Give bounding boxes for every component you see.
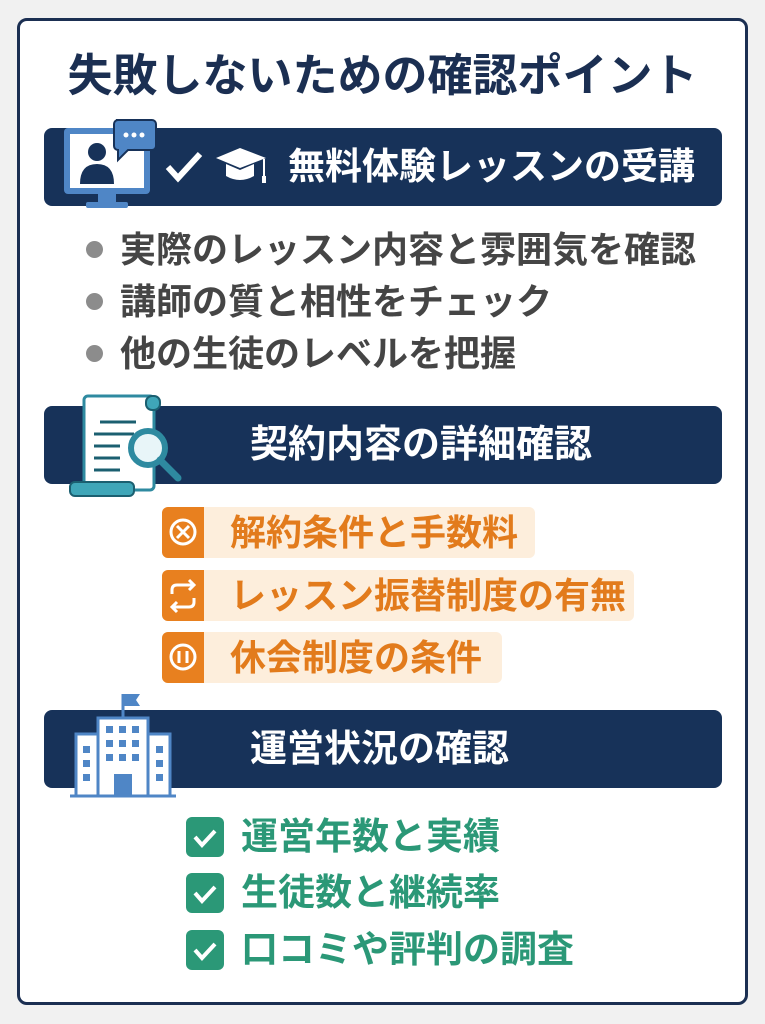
green item 2: 生徒数と継続率: [241, 872, 500, 913]
orange item 2: [162, 570, 634, 621]
icon: check: [166, 152, 202, 182]
header bar: free trial: 無料体験レッスンの受講: [288, 146, 695, 187]
bullet 2: 講師の質と相性をチェック: [120, 281, 552, 322]
orange item 3: 休会制度の条件: [230, 637, 482, 678]
orange item 1: [162, 507, 535, 558]
icon: monitor with person: [64, 119, 157, 208]
header bar: contract: 契約内容の詳細確認: [250, 424, 592, 466]
header bar: free trial: [44, 128, 722, 206]
header bar: contract: [44, 406, 722, 484]
green item 1: 運営年数と実績: [241, 816, 500, 857]
icon: graduation cap: [216, 148, 266, 183]
header bar: operations: [44, 710, 722, 788]
bullet list: [86, 229, 696, 374]
title: 失敗しないための確認ポイント: [67, 50, 698, 101]
icon: building: [70, 694, 176, 798]
header bar: operations: 運営状況の確認: [250, 728, 509, 769]
orange item 3: [162, 632, 502, 683]
orange item 1: 解約条件と手数料: [230, 512, 518, 553]
icon: document with magnifier: [69, 394, 182, 497]
bullet 1: 実際のレッスン内容と雰囲気を確認: [120, 229, 696, 270]
bullet 3: 他の生徒のレベルを把握: [120, 333, 516, 374]
orange item 2: レッスン振替制度の有無: [230, 575, 626, 616]
green item 3: 口コミや評判の調査: [241, 929, 574, 970]
